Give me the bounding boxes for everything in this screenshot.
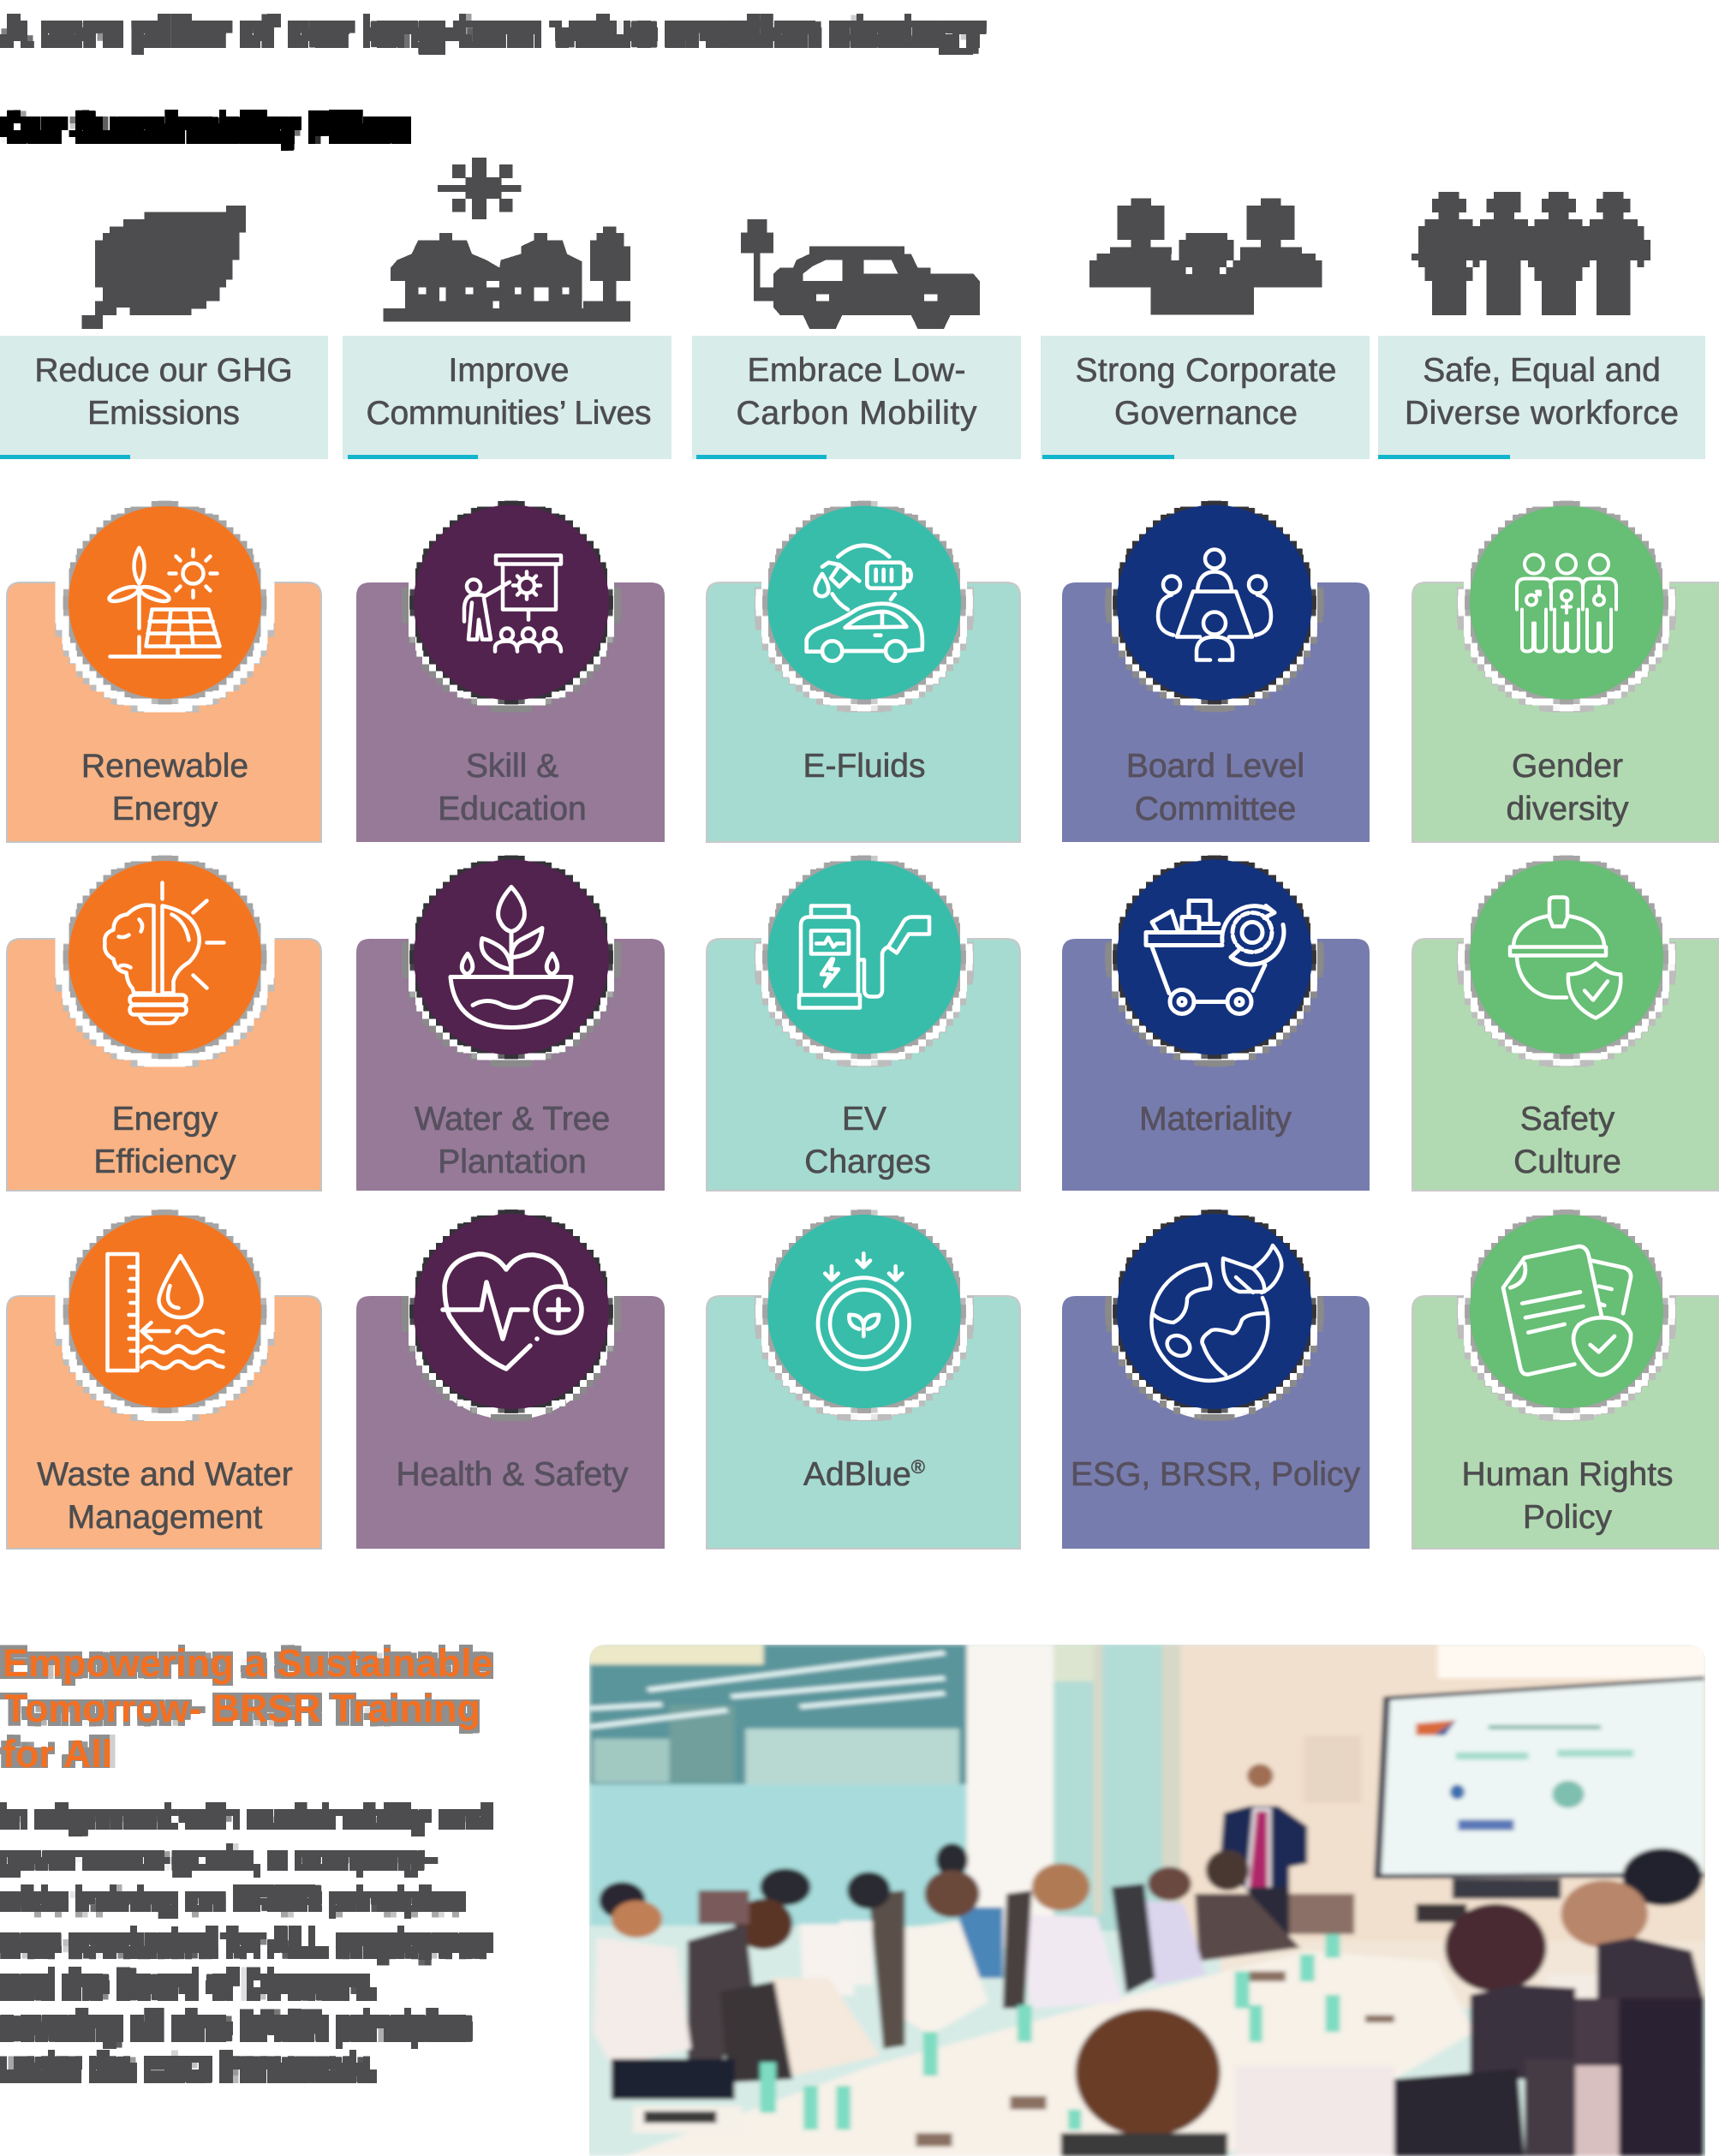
panel: reduce our GHG emissions xyxy=(0,336,328,459)
card: adblue: ® xyxy=(911,1456,925,1478)
card: gender diversity: Gender xyxy=(1512,748,1623,785)
text block: training description: under the ESG framework. xyxy=(1,2051,376,2086)
card: ev charges: Charges xyxy=(804,1144,931,1180)
card: adblue xyxy=(707,1203,1020,1549)
card: gender diversity xyxy=(1412,493,1719,842)
panel: improve communities' lives: Improve xyxy=(449,352,569,389)
card: human rights policy: Policy xyxy=(1523,1499,1613,1536)
card: human rights policy: Human Rights xyxy=(1461,1456,1674,1493)
icon: leaf xyxy=(82,206,246,329)
card: health and safety xyxy=(356,1203,665,1549)
card: materiality: Materiality xyxy=(1139,1101,1292,1138)
card: skill and education: Skill & xyxy=(466,748,558,785)
card: human rights policy xyxy=(1412,1203,1719,1549)
card: materiality xyxy=(1062,850,1370,1191)
card: renewable energy: Renewable xyxy=(81,748,248,785)
panel: strong corporate governance: Governance xyxy=(1114,395,1298,432)
panel: reduce our GHG emissions: Reduce our GHG xyxy=(34,352,293,389)
panel: safe, equal and diverse workforce xyxy=(1378,336,1705,459)
card: water and tree plantation xyxy=(356,850,665,1191)
card: e-fluids xyxy=(707,493,1020,842)
card: board level committee: Committee xyxy=(1135,791,1296,827)
icon: helmet and shield xyxy=(1510,898,1621,1018)
card: health and safety: Health & Safety xyxy=(397,1456,629,1493)
card: ev charges xyxy=(707,848,1020,1191)
icon: documents with shield xyxy=(1503,1246,1631,1375)
panel: safe, equal and diverse workforce: Safe, Equal and xyxy=(1423,352,1661,389)
heading: empowering a sustainable tomorrow xyxy=(3,1641,493,1776)
card: board level committee xyxy=(1062,495,1370,842)
card: energy efficiency: Energy xyxy=(112,1101,218,1138)
card: safety culture xyxy=(1412,848,1719,1191)
icon: fuel nozzle, battery and car xyxy=(807,546,922,661)
panel: strong corporate governance: Strong Corporate xyxy=(1076,352,1336,389)
card: esg, brsr, policy: ESG, BRSR, Policy xyxy=(1071,1456,1361,1493)
icon: heart with pulse and plus xyxy=(443,1254,582,1369)
text block: training description: In alignment with sustainability and xyxy=(1,1799,491,1834)
card: safety culture: Culture xyxy=(1513,1144,1621,1180)
card: e-fluids: E-Fluids xyxy=(803,748,926,785)
panel: reduce our GHG emissions: Emissions xyxy=(87,395,240,432)
text block: training description: and the Board of Directors, xyxy=(1,1967,379,2002)
card: skill and education: Education xyxy=(438,791,587,827)
card: board level committee: Board Level xyxy=(1126,748,1304,785)
icon: sun, houses and tree xyxy=(384,158,630,322)
card: waste and water management xyxy=(7,1200,321,1549)
text block: training description: covering all nine BRSR principles xyxy=(1,2009,469,2044)
heading: empowering a sustainable tomorrow: for All xyxy=(3,1732,112,1776)
card: esg, brsr, policy xyxy=(1062,1204,1370,1549)
card: adblue: AdBlue xyxy=(803,1456,911,1493)
panel: embrace low-carbon mobility: Embrace Low- xyxy=(747,352,966,389)
card: waste and water management: Waste and Water xyxy=(37,1456,293,1493)
card: skill and education xyxy=(356,495,665,842)
heading: empowering a sustainable tomorrow: Tomorrow- BRSR Training xyxy=(4,1687,480,1730)
panel: strong corporate governance xyxy=(1041,336,1370,459)
icon: governance group xyxy=(1089,199,1322,315)
icon: brain light bulb xyxy=(104,882,224,1023)
card: renewable energy: Energy xyxy=(112,791,218,827)
card: water and tree plantation: Water & Tree xyxy=(415,1101,610,1138)
card: energy efficiency: Efficiency xyxy=(93,1144,236,1180)
heading: empowering a sustainable tomorrow: Empowering a Sustainable xyxy=(3,1641,493,1685)
panel: embrace low-carbon mobility xyxy=(692,336,1021,459)
card: ev charges: EV xyxy=(842,1101,886,1138)
panel: safe, equal and diverse workforce: Diverse workforce xyxy=(1405,395,1679,432)
icon: plant in bowl xyxy=(451,887,571,1028)
panel: embrace low-carbon mobility: Carbon Mobility xyxy=(737,395,977,432)
card: gender diversity: diversity xyxy=(1506,791,1629,827)
panel: improve communities' lives xyxy=(343,336,671,459)
card: energy efficiency xyxy=(7,846,321,1191)
icon: rings with sprout and arrows xyxy=(818,1253,910,1369)
photo: training session in a boardroom xyxy=(582,1641,1719,2156)
section heading: our sustainability pillars: Our Sustainability Pillars xyxy=(2,108,412,147)
icon: boardroom table xyxy=(1158,550,1271,660)
icon: globe with leaf xyxy=(1151,1245,1281,1381)
card: waste and water management: Management xyxy=(68,1499,262,1536)
panel: improve communities' lives: Communities’ Lives xyxy=(367,395,651,432)
icon: electric car with plug xyxy=(741,219,980,329)
card: safety culture: Safety xyxy=(1520,1101,1615,1138)
icon: cart with gear xyxy=(1146,901,1284,1014)
icon: charging station xyxy=(799,906,929,1007)
text block: training description: wide training on BRSR principles xyxy=(0,1883,463,1918)
card: renewable energy xyxy=(7,492,321,842)
icon: workforce people xyxy=(1412,192,1650,315)
icon: ruler, droplet and water waves xyxy=(108,1254,223,1371)
icon: presenter and audience xyxy=(464,555,561,651)
title: A core pillar of our long-term value creation strategy xyxy=(2,9,983,53)
icon: three people with gender symbols xyxy=(1517,555,1616,651)
card: water and tree plantation: Plantation xyxy=(438,1144,587,1180)
text block: training description: was conducted for ALL employees xyxy=(0,1925,490,1960)
text block: training description xyxy=(0,1799,491,2086)
text block: training description: governance goals, a company- xyxy=(1,1841,434,1876)
icon: wind turbine, sun and solar panel xyxy=(108,548,219,656)
